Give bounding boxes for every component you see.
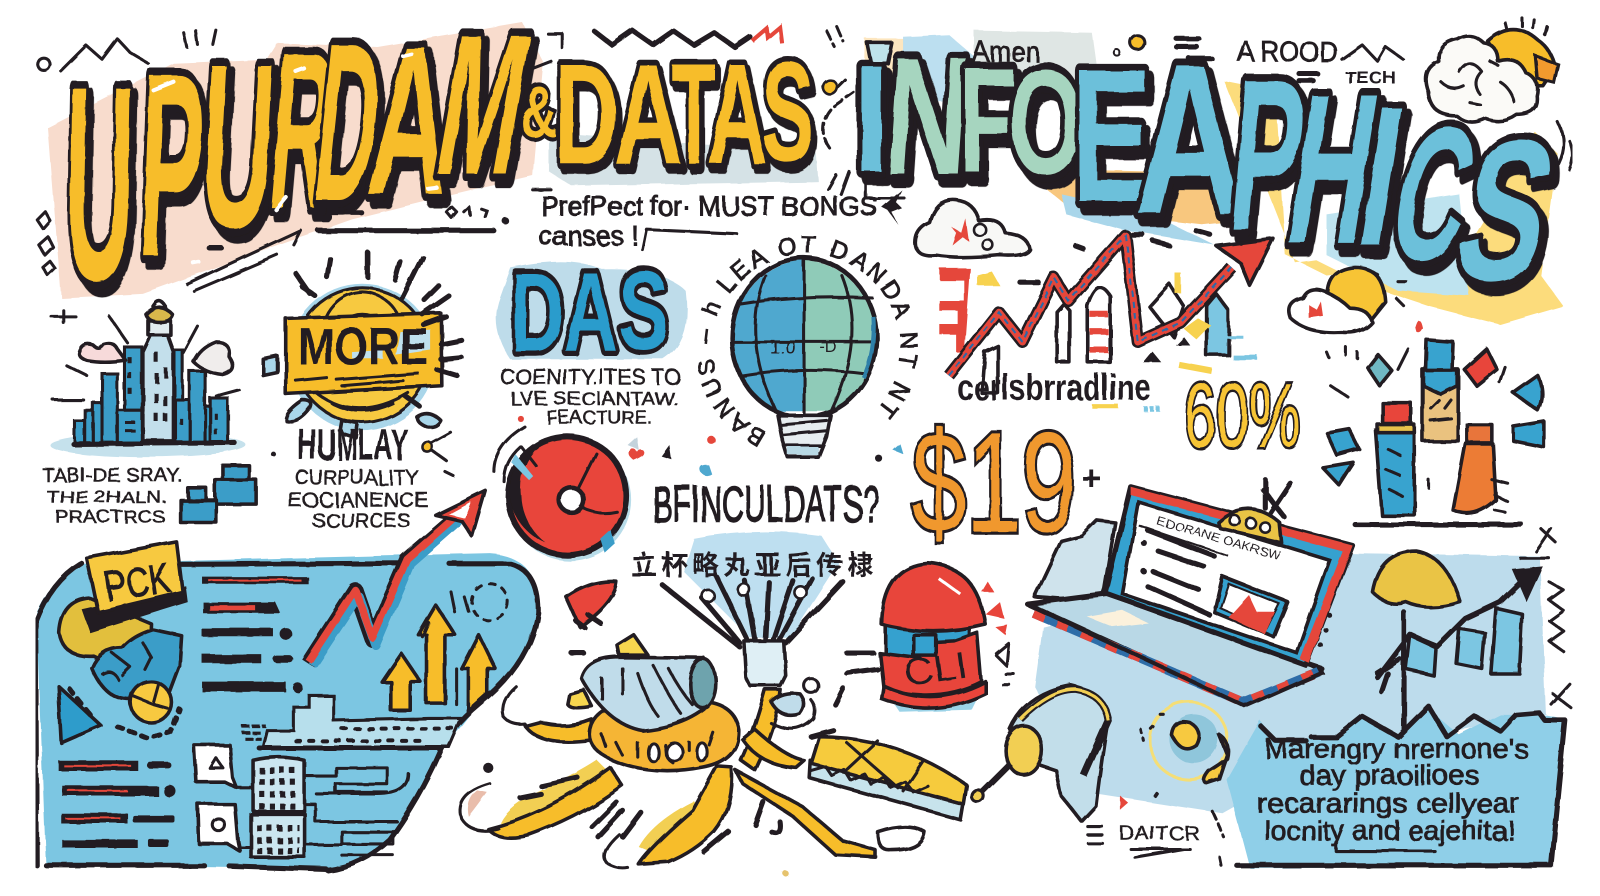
title: DATAS: A xyxy=(613,34,683,194)
legs xyxy=(488,690,876,864)
title: UPURDAM: A xyxy=(362,2,458,239)
title: UPURDAM: U xyxy=(62,30,137,340)
title: INFOEAPHICS: P xyxy=(1221,36,1314,275)
pie illustration xyxy=(809,737,966,819)
title: INFOEAPHICS: I xyxy=(853,34,890,205)
title: DATAS xyxy=(554,32,814,195)
title: INFOEAPHICS: C xyxy=(1375,89,1492,300)
title highlights: yellow xyxy=(153,54,437,263)
red wedge icon xyxy=(566,581,616,627)
panel: lower right pale blue backdrop xyxy=(1035,553,1546,813)
title: INFOEAPHICS: O xyxy=(1008,38,1084,206)
red disc gauge xyxy=(494,427,632,561)
DAS caption: LVE SECIANTAW. xyxy=(510,388,679,409)
icon: PCK sign: PCK xyxy=(101,555,173,610)
top right label: A ROOD TECH: A ROOD xyxy=(1238,36,1338,68)
title: INFOEAPHICS: H xyxy=(1274,50,1392,289)
message cards xyxy=(194,745,240,851)
label: Amen: Amen xyxy=(972,36,1040,68)
icon: brain cloud and sun xyxy=(1426,18,1572,169)
globe light bulb: -D xyxy=(819,338,837,356)
panel: blue text callout: day praoilioes xyxy=(1299,760,1480,791)
city caption: THE 2HALN. xyxy=(47,487,167,507)
drum xyxy=(582,657,709,731)
chart: up arrows xyxy=(382,584,508,711)
bar list lower xyxy=(58,760,176,848)
globe light bulb xyxy=(732,258,877,457)
chart label: cerlsbrradline xyxy=(957,367,1151,408)
DAS caption: FEACTURE. xyxy=(546,407,652,428)
scattered bottle icons xyxy=(1322,340,1544,525)
small cloud with dome xyxy=(1289,267,1423,358)
title: UPURDAM: P xyxy=(135,19,209,311)
title: INFOEAPHICS: E xyxy=(1071,29,1152,242)
strip: ship and dots xyxy=(242,696,461,748)
laptop illustration: EDORANE OAKRSW xyxy=(1155,514,1282,563)
top doodles left xyxy=(37,27,782,291)
top right label: A ROOD TECH: TECH xyxy=(1345,68,1396,88)
title: DATAS: A xyxy=(707,34,768,194)
dot of the letter i xyxy=(867,43,892,63)
HUMLAY text block: SCURCES xyxy=(312,509,410,533)
city skyline illustration xyxy=(50,301,246,457)
stat: 60%: 60% xyxy=(1184,365,1301,467)
chart: red zigzag with towers xyxy=(940,231,1273,393)
top right label: A ROOD TECH xyxy=(1114,36,1403,88)
panel: blue text callout xyxy=(1227,706,1565,868)
laptop illustration xyxy=(1028,480,1352,706)
title: UPURDAM: D xyxy=(305,0,392,249)
stat: $19+: + xyxy=(1082,460,1102,498)
right edge doodles xyxy=(1520,529,1571,708)
chart arrow: red zigzag xyxy=(308,491,486,665)
title: INFOEAPHICS: F xyxy=(959,37,1017,204)
title: DATAS: S xyxy=(761,32,814,192)
DAS caption xyxy=(500,365,681,428)
dashed orbit xyxy=(69,689,179,739)
HUMLAY text block: HUMLAY xyxy=(298,419,408,470)
MORE sign with burst xyxy=(263,253,461,438)
DAS caption: COENITY.ITES TO xyxy=(500,365,681,390)
panel: blue text callout: locnity and eajehita! xyxy=(1264,815,1515,846)
gear badge xyxy=(1141,702,1229,796)
globe light bulb: 1.0 xyxy=(770,337,796,358)
MORE sign with burst: MORE xyxy=(298,317,429,376)
icon: PCK sign xyxy=(59,542,188,722)
claws xyxy=(460,686,924,868)
subtitle: canses ! xyxy=(539,220,639,251)
city caption: PRACTRCS xyxy=(55,506,165,526)
HUMLAY text block: EOCIANENCE xyxy=(288,488,429,512)
robot dashes xyxy=(483,614,878,877)
robot character xyxy=(460,635,924,868)
title backing blobs xyxy=(48,22,1563,325)
title: UPURDAM: R xyxy=(261,5,343,255)
panel: blue text callout: Marengry nrernone's xyxy=(1264,733,1529,764)
DAS heading: D xyxy=(510,251,564,376)
bar list upper xyxy=(202,577,308,693)
confetti near bulb xyxy=(629,436,903,475)
HUMLAY text block: CURPUALITY xyxy=(295,466,418,490)
title: UPURDAM xyxy=(62,0,544,340)
yellow ring xyxy=(590,702,739,771)
fan of lines with glyph row xyxy=(631,532,874,647)
icon: hard hat and growth chart xyxy=(1372,551,1543,735)
DAS heading: A xyxy=(563,250,618,376)
title: DATAS: D xyxy=(554,35,619,194)
lamp illustration xyxy=(971,686,1108,821)
title: DATAS: T xyxy=(671,35,716,195)
DAS heading: S xyxy=(618,248,669,374)
icon: blue boxes xyxy=(181,465,256,522)
HUMLAY text block xyxy=(271,419,453,533)
DAITCR label: DAITCR xyxy=(1119,823,1200,845)
title: ampersand: & xyxy=(520,70,557,153)
fork head xyxy=(744,641,786,686)
city caption xyxy=(42,465,183,526)
title: INFOEAPHICS: S xyxy=(1440,100,1572,323)
DAS heading xyxy=(496,248,687,376)
circuit grids xyxy=(237,757,408,857)
subtitle xyxy=(533,190,878,251)
fan of lines with glyph row: 立 杯 略 丸 亚 后 传 棣 xyxy=(631,551,874,581)
panel: blue text callout: recararings cellyear xyxy=(1257,787,1519,818)
subtitle: PrefPect for· MUST BONGS xyxy=(541,190,878,221)
title: INFOEAPHICS: A xyxy=(1135,20,1245,259)
circular text around bulb: BANUS – h LEA OT DANDA NT NT xyxy=(698,236,918,448)
title: UPURDAM: U xyxy=(195,16,281,276)
icon: small cloud xyxy=(915,200,1030,257)
question heading: BFINCULDATS? xyxy=(652,475,880,532)
red canister xyxy=(880,563,1013,712)
red canister: CLI xyxy=(902,644,970,694)
panel: blue dashboard blob xyxy=(36,491,539,870)
city caption: TABI-DE SRAY. xyxy=(42,465,183,487)
stat: $19+: $19 xyxy=(911,404,1077,563)
top center doodles xyxy=(822,27,904,225)
title: INFOEAPHICS: I xyxy=(1345,66,1417,288)
icon: blue triangle xyxy=(58,686,101,743)
title: INFOEAPHICS xyxy=(853,20,1572,323)
title: INFOEAPHICS: N xyxy=(879,22,976,209)
DAITCR label xyxy=(1088,796,1224,867)
